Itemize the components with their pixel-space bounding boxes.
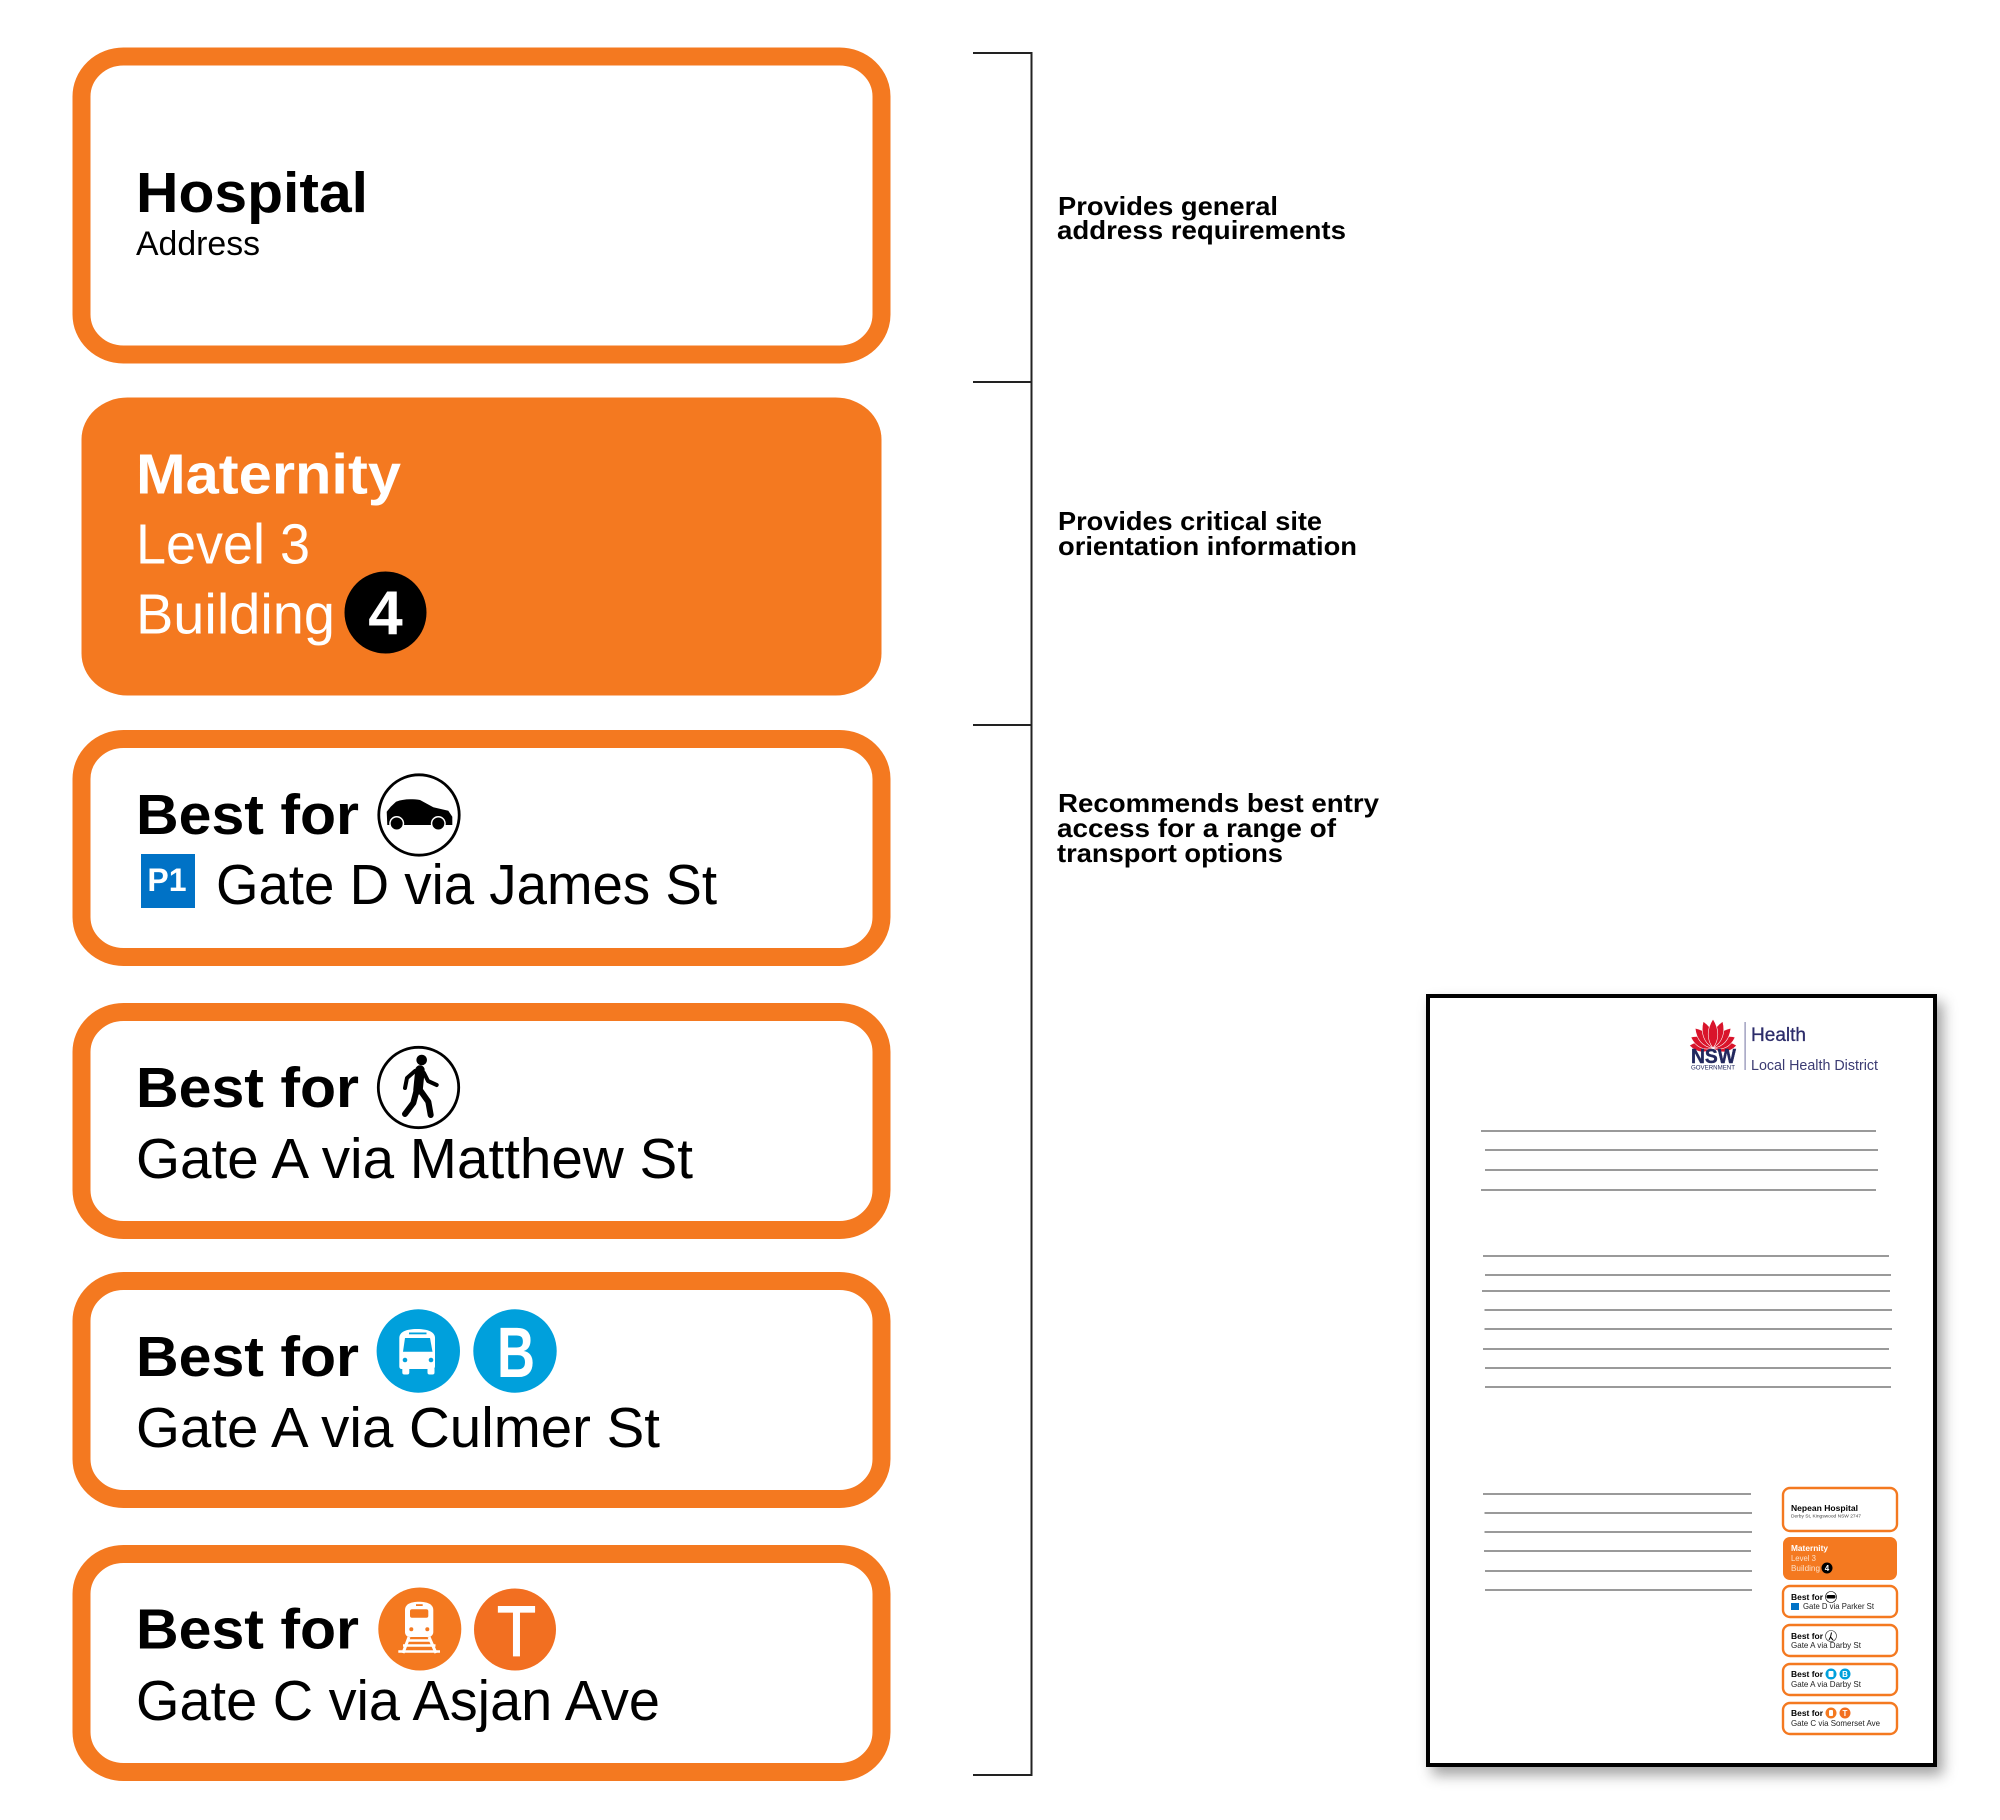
- text: NSW: NSW: [1691, 1046, 1736, 1068]
- panel: best for car: [82, 739, 882, 957]
- panel: example letter document: [1428, 996, 1943, 1775]
- annotation: general address: Provides general: [1058, 191, 1278, 221]
- mini card: best for train: Best for: [1791, 1708, 1824, 1718]
- divider: [1744, 1022, 1746, 1070]
- annotation: general address: address requirements: [1057, 215, 1346, 245]
- heading: Best for: Best for: [136, 1325, 359, 1389]
- icon: bus: [377, 1309, 460, 1393]
- icon: building number 4: 4: [368, 579, 403, 648]
- mini card: best for walking: [1783, 1625, 1897, 1656]
- mini card: best for train: [1783, 1703, 1897, 1734]
- mini card: best for bus: Gate A via Darby St: [1791, 1679, 1862, 1689]
- icon: train: [378, 1588, 461, 1670]
- mini card: best for bus: Best for: [1791, 1669, 1824, 1679]
- mini card: hospital: Derby St, Kingswood NSW 2747: [1791, 1514, 1862, 1518]
- mini card: best for car: Gate D via Parker St: [1803, 1601, 1875, 1611]
- icon: B for bus: [473, 1309, 557, 1393]
- mini card: best for train: Gate C via Somerset Ave: [1791, 1718, 1880, 1728]
- icon: B for bus: B: [497, 1314, 535, 1393]
- icon: waratah flower: [1689, 1019, 1737, 1053]
- text placeholder lines: paragraph 3: [1483, 1494, 1752, 1590]
- panel: maternity orientation card: [82, 398, 882, 696]
- annotation: transport options: transport options: [1057, 838, 1283, 868]
- text placeholder lines: paragraph 1: [1481, 1131, 1878, 1190]
- mini card: best for car: [1783, 1586, 1897, 1617]
- icon: P1 parking sign: [141, 854, 195, 908]
- mini card: best for bus: B: [1842, 1670, 1848, 1679]
- mini card: best for walking: Gate A via Darby St: [1791, 1640, 1862, 1650]
- panel: best for bus: [82, 1281, 882, 1499]
- heading: Best for: Best for: [136, 1056, 359, 1120]
- text: Local Health District: Local Health District: [1751, 1057, 1879, 1074]
- mini card: maternity: 4: [1825, 1564, 1830, 1573]
- annotation: site orientation: orientation information: [1058, 531, 1357, 561]
- mini card: hospital: Nepean Hospital: [1791, 1503, 1858, 1513]
- logo: NSW Health: [1689, 1019, 1879, 1074]
- heading: Best for: Best for: [136, 1598, 359, 1662]
- mini card: maternity: [1783, 1537, 1897, 1580]
- mini card: maternity: Level 3: [1791, 1553, 1816, 1563]
- text placeholder lines: paragraph 2: [1482, 1256, 1892, 1387]
- annotation: general address: [1057, 191, 1346, 245]
- annotation: site orientation: Provides critical site: [1058, 506, 1322, 536]
- text: Gate A via Culmer St: Gate A via Culmer St: [136, 1396, 660, 1460]
- heading: Maternity: Maternity: [136, 442, 401, 506]
- panel: hospital address card: [82, 56, 882, 354]
- panel: best for train: [82, 1554, 882, 1772]
- annotation: transport options: access for a range of: [1057, 813, 1336, 843]
- text: Gate C via Asjan Ave: Gate C via Asjan Ave: [136, 1669, 660, 1733]
- mini card: best for car: Best for: [1791, 1592, 1824, 1602]
- heading: Best for: Best for: [136, 783, 359, 847]
- icon: building number 4: [344, 572, 426, 654]
- icon: P1 parking sign: P1: [147, 862, 187, 898]
- annotation: site orientation: [1058, 506, 1357, 561]
- mini card: best for bus: [1783, 1664, 1897, 1695]
- icon: car: [379, 775, 459, 855]
- panel: best for walking: [82, 1012, 882, 1230]
- mini card: maternity: Building: [1791, 1563, 1820, 1573]
- bracket: groups the three card sections: [973, 53, 1032, 1775]
- text: Level 3: Level 3: [136, 512, 310, 576]
- icon: T for train: [474, 1588, 556, 1672]
- text: Address: Address: [136, 225, 260, 263]
- text: Health: Health: [1751, 1025, 1806, 1046]
- text: Building: Building: [136, 582, 335, 646]
- icon: pedestrian: [378, 1047, 459, 1128]
- mini card: best for train: T: [1843, 1709, 1848, 1718]
- annotation: transport options: Recommends best entry: [1058, 788, 1380, 818]
- annotation: transport options: [1057, 788, 1380, 868]
- text: Gate D via James St: Gate D via James St: [216, 853, 717, 917]
- mini card: hospital: [1783, 1488, 1897, 1531]
- text: GOVERNMENT: GOVERNMENT: [1691, 1066, 1735, 1072]
- mini card: best for walking: Best for: [1791, 1631, 1824, 1641]
- text: Gate A via Matthew St: Gate A via Matthew St: [136, 1127, 693, 1191]
- icon: T for train: T: [497, 1593, 536, 1672]
- heading: Hospital: Hospital: [136, 161, 368, 225]
- mini card: maternity: Maternity: [1791, 1543, 1828, 1553]
